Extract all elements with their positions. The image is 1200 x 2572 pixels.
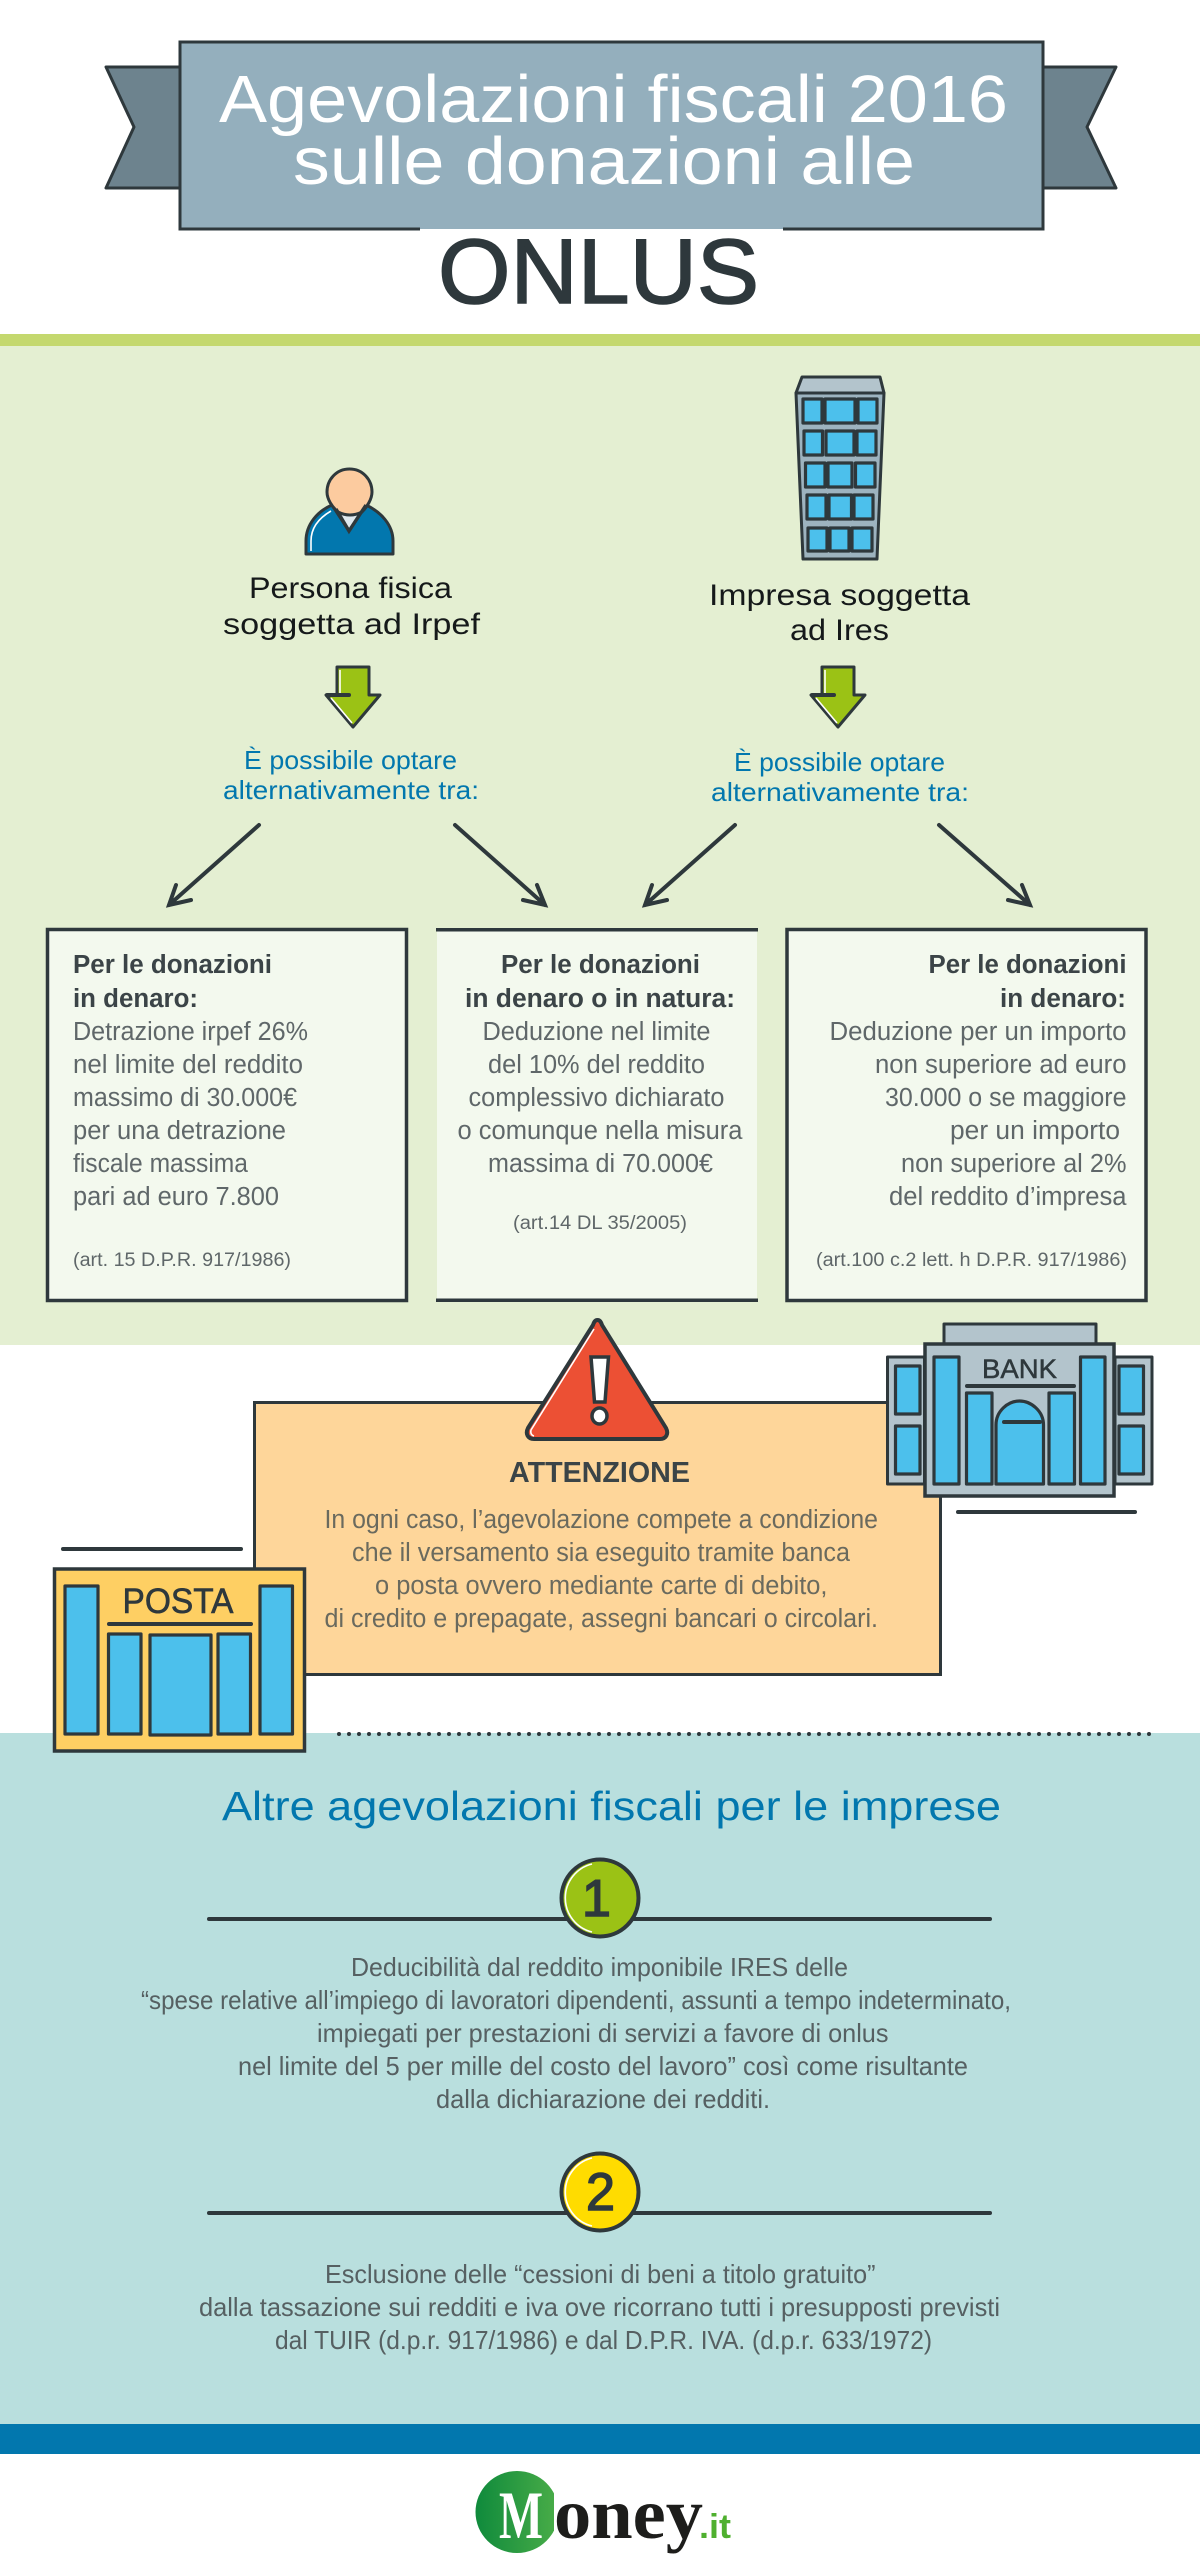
blue footer band <box>0 2424 1200 2454</box>
body text <box>830 1018 1127 1211</box>
body text: 30.000 o se maggiore <box>885 1084 1126 1112</box>
attenzione body text <box>324 1506 878 1633</box>
title line 1: Agevolazioni fiscali 2016 <box>219 62 1008 137</box>
icon: person <box>306 469 393 554</box>
body text: del reddito d’impresa <box>889 1183 1127 1211</box>
icon: green arrow right <box>811 667 865 727</box>
label: impresa: ad Ires <box>790 614 889 647</box>
attenzione body text: In ogni caso, l’agevolazione compete a condizione <box>324 1506 878 1534</box>
text: agevolazione 1: impiegati per prestazioni di servizi a favore di onlus <box>317 2018 888 2048</box>
note: optare right: alternativamente tra: <box>711 777 969 807</box>
body text <box>73 1018 308 1211</box>
note: optare right <box>711 747 969 807</box>
body text: Deduzione nel limite <box>482 1018 710 1046</box>
teal section background <box>0 1733 1200 2424</box>
title line 2: sulle donazioni alle <box>293 124 915 199</box>
heading <box>73 951 272 1013</box>
reference: (art. 15 D.P.R. 917/1986) <box>73 1250 291 1271</box>
note: optare right: È possibile optare <box>734 747 945 777</box>
heading: Per le donazioni <box>501 951 700 979</box>
panel: donazioni denaro o natura <box>436 928 758 1302</box>
arrow: to box 1 <box>169 825 259 905</box>
text: agevolazione 2: dal TUIR (d.p.r. 917/1986) e dal D.P.R. IVA. (d.p.r. 633/1972) <box>275 2325 932 2355</box>
text: agevolazione 1 <box>141 1952 1011 2114</box>
heading <box>465 951 735 1013</box>
number 2: 2 <box>586 2163 615 2222</box>
title: ONLUS: ONLUS <box>438 221 759 323</box>
green band background <box>0 334 1200 1345</box>
icon: warning triangle <box>527 1320 667 1439</box>
heading: in denaro o in natura: <box>465 985 735 1013</box>
logo: money.it <box>476 2471 731 2554</box>
icon: office building <box>796 377 884 559</box>
body text: Detrazione irpef 26% <box>73 1018 308 1046</box>
text: agevolazione 1: dalla dichiarazione dei redditi. <box>436 2084 770 2114</box>
heading: Per le donazioni <box>928 951 1126 979</box>
divider with number 1 <box>209 1860 990 1936</box>
body text: Deduzione per un importo <box>830 1018 1126 1046</box>
body text: per una detrazione <box>73 1117 286 1145</box>
text: agevolazione 2: Esclusione delle “cessioni di beni a titolo gratuito” <box>325 2259 876 2289</box>
logo: money.it: oney <box>554 2474 703 2554</box>
note: optare left: alternativamente tra: <box>223 775 479 805</box>
label: persona fisica: soggetta ad Irpef <box>223 608 481 641</box>
body text: massimo di 30.000€ <box>73 1084 297 1112</box>
text: agevolazione 2: dalla tassazione sui redditi e iva ove ricorrano tutti i presupposti previsti <box>199 2292 1000 2322</box>
body text: per un importo <box>950 1117 1120 1145</box>
note: optare left <box>223 745 479 805</box>
text: agevolazione 1: “spese relative all’impiego di lavoratori dipendenti, assunti a tempo indeterminato, <box>141 1985 1011 2015</box>
icon: bank <box>888 1324 1152 1496</box>
logo: money.it: .it <box>699 2508 731 2546</box>
ribbon left tail <box>106 67 180 188</box>
heading: altre agevolazioni: Altre agevolazioni fiscali per le imprese <box>222 1783 1001 1829</box>
note: optare left: È possibile optare <box>244 745 457 775</box>
body text: non superiore ad euro <box>875 1051 1126 1079</box>
body text: non superiore al 2% <box>901 1150 1126 1178</box>
heading: Per le donazioni <box>73 951 272 979</box>
bank label: BANK <box>982 1354 1057 1384</box>
body text: o comunque nella misura <box>458 1117 743 1145</box>
body text <box>458 1018 743 1178</box>
text: agevolazione 1: Deducibilità dal reddito imponibile IRES delle <box>351 1952 848 1982</box>
label: persona fisica: Persona fisica <box>249 572 452 605</box>
panel: donazioni persona fisica <box>48 930 406 1300</box>
body text: nel limite del reddito <box>73 1051 303 1079</box>
panel: donazioni impresa <box>787 930 1146 1300</box>
divider with number 2 <box>209 2154 990 2230</box>
reference: (art.100 c.2 lett. h D.P.R. 917/1986) <box>816 1250 1127 1271</box>
label: impresa <box>709 579 970 647</box>
ribbon right tail <box>1043 67 1116 188</box>
body text: del 10% del reddito <box>488 1051 705 1079</box>
reference: (art.14 DL 35/2005) <box>513 1213 687 1234</box>
icon: post office <box>54 1569 304 1751</box>
body text: massima di 70.000€ <box>488 1150 713 1178</box>
number 1: 1 <box>582 1870 611 1928</box>
arrow: to box 3 <box>939 825 1030 905</box>
arrow: to box 2 from left <box>455 825 545 905</box>
icon: green arrow left <box>326 667 380 727</box>
label: impresa: Impresa soggetta <box>709 579 970 612</box>
arrow: to box 2 from right <box>645 825 735 905</box>
body text: fiscale massima <box>73 1150 249 1178</box>
heading: in denaro: <box>1000 985 1126 1013</box>
ribbon main panel <box>179 42 1044 229</box>
heading <box>928 951 1126 1013</box>
heading: attenzione: ATTENZIONE <box>509 1457 690 1489</box>
text: agevolazione 1: nel limite del 5 per mille del costo del lavoro” così come risultante <box>238 2051 968 2081</box>
attenzione body text: o posta ovvero mediante carte di debito, <box>375 1572 828 1600</box>
panel: attenzione <box>254 1402 940 1674</box>
body text: complessivo dichiarato <box>468 1084 724 1112</box>
heading: in denaro: <box>73 985 198 1013</box>
body text: pari ad euro 7.800 <box>73 1183 279 1211</box>
label: persona fisica <box>223 572 481 641</box>
post office label: POSTA <box>122 1582 234 1621</box>
title ribbon <box>106 42 1116 229</box>
attenzione body text: di credito e prepagate, assegni bancari o circolari. <box>324 1605 878 1633</box>
attenzione body text: che il versamento sia eseguito tramite banca <box>352 1539 851 1567</box>
text: agevolazione 2 <box>199 2259 1000 2355</box>
logo: money.it: M <box>499 2477 543 2553</box>
